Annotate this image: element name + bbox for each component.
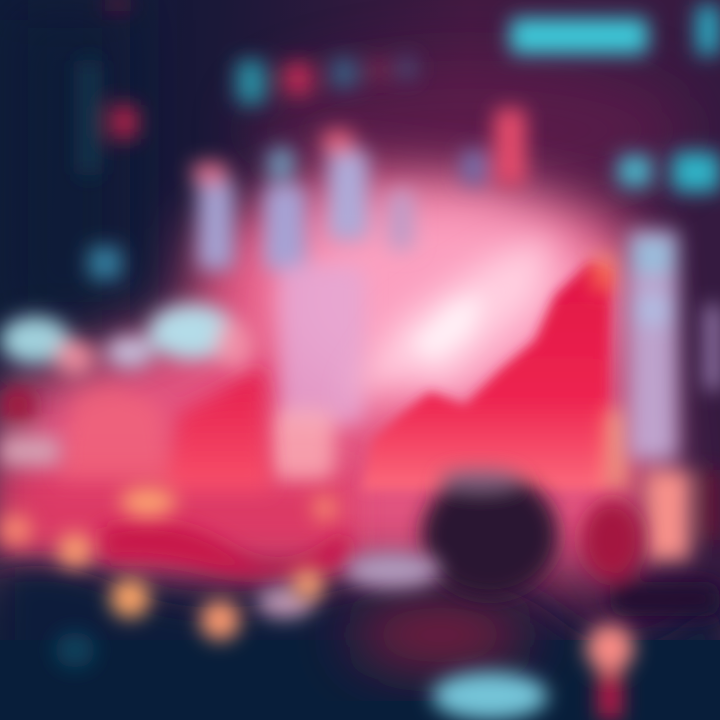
white streak core xyxy=(410,295,485,360)
cyan blob: bottom xyxy=(55,632,548,720)
white-pink streak xyxy=(350,240,550,400)
cyan bars: top right xyxy=(510,5,720,192)
red area chart: left xyxy=(60,365,270,490)
central pink glow xyxy=(0,170,660,570)
orange peak highlight xyxy=(592,255,627,490)
lavender column: right xyxy=(628,230,720,560)
bottom dark foreground xyxy=(0,540,720,640)
lavender bars: mid chart xyxy=(192,130,414,480)
maroon patch: bottom xyxy=(350,605,530,665)
red wave band xyxy=(100,523,350,576)
red area chart: right xyxy=(362,262,612,490)
lavender blobs foreground xyxy=(257,552,440,618)
bottom dark base xyxy=(0,640,720,720)
clouds: left xyxy=(0,304,253,466)
pink and lavender bars: upper right xyxy=(462,108,526,186)
orange glowing dots xyxy=(0,487,634,720)
dark blob foreground xyxy=(422,470,720,616)
small legend squares: top xyxy=(80,0,416,280)
